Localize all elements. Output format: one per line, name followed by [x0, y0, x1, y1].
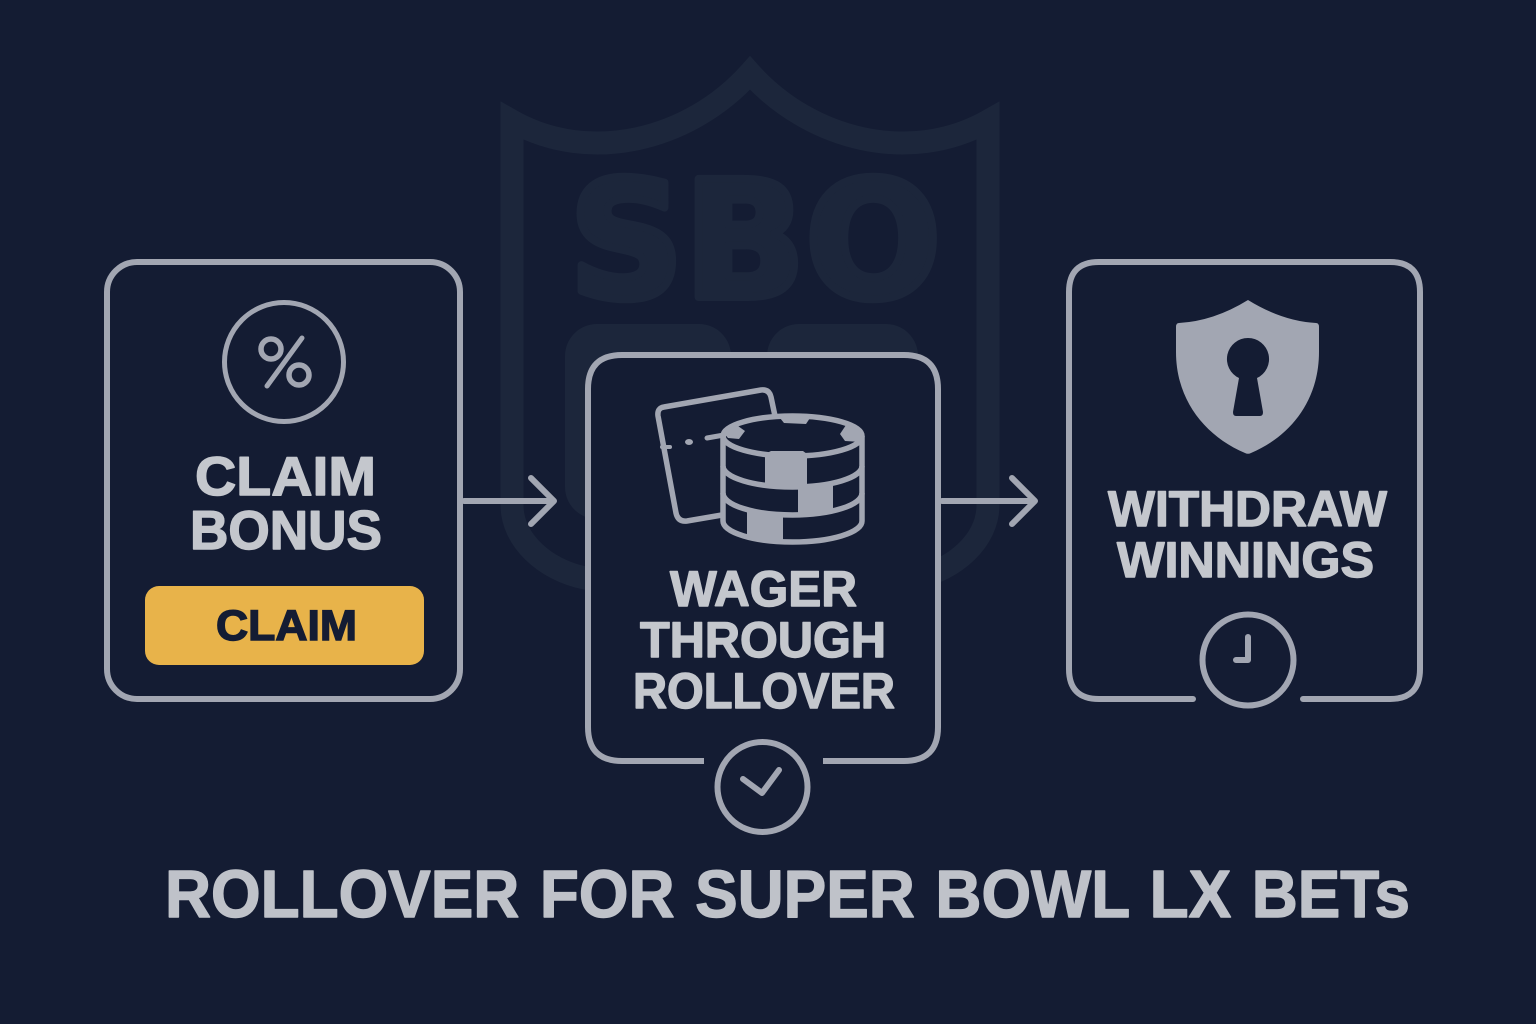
- watermark: SBO shield: [512, 73, 988, 578]
- heading: claim bonus: [190, 445, 382, 561]
- heading: claim bonus: CLAIM: [195, 445, 376, 507]
- icon: betting slip and chip stack: [658, 390, 862, 543]
- arrow: claim to wager: [464, 478, 554, 524]
- heading: wager through rollover: WAGER: [670, 561, 857, 617]
- heading: withdraw winnings: WITHDRAW: [1108, 481, 1388, 537]
- title: ROLLOVER FOR SUPER BOWL LX BETs: [165, 857, 1410, 932]
- panel: wager through rollover: [588, 355, 938, 832]
- panel: withdraw winnings: [1069, 262, 1420, 706]
- heading: wager through rollover: [633, 561, 895, 719]
- heading: wager through rollover: THROUGH: [640, 612, 886, 668]
- icon: percent badge: [224, 302, 344, 422]
- heading: withdraw winnings: [1108, 481, 1388, 588]
- icon: clock badge: [1202, 614, 1294, 706]
- arrow: wager to withdraw: [942, 478, 1035, 524]
- icon: check badge: [718, 742, 808, 832]
- watermark: SBO shield: SBO: [569, 148, 941, 336]
- heading: withdraw winnings: WINNINGS: [1117, 532, 1374, 588]
- heading: claim bonus: BONUS: [190, 499, 382, 561]
- button: claim: CLAIM: [216, 602, 357, 650]
- button: claim: [145, 586, 424, 665]
- heading: wager through rollover: ROLLOVER: [633, 663, 895, 719]
- panel: claim bonus: [107, 262, 460, 699]
- icon: shield with keyhole: [1176, 300, 1319, 454]
